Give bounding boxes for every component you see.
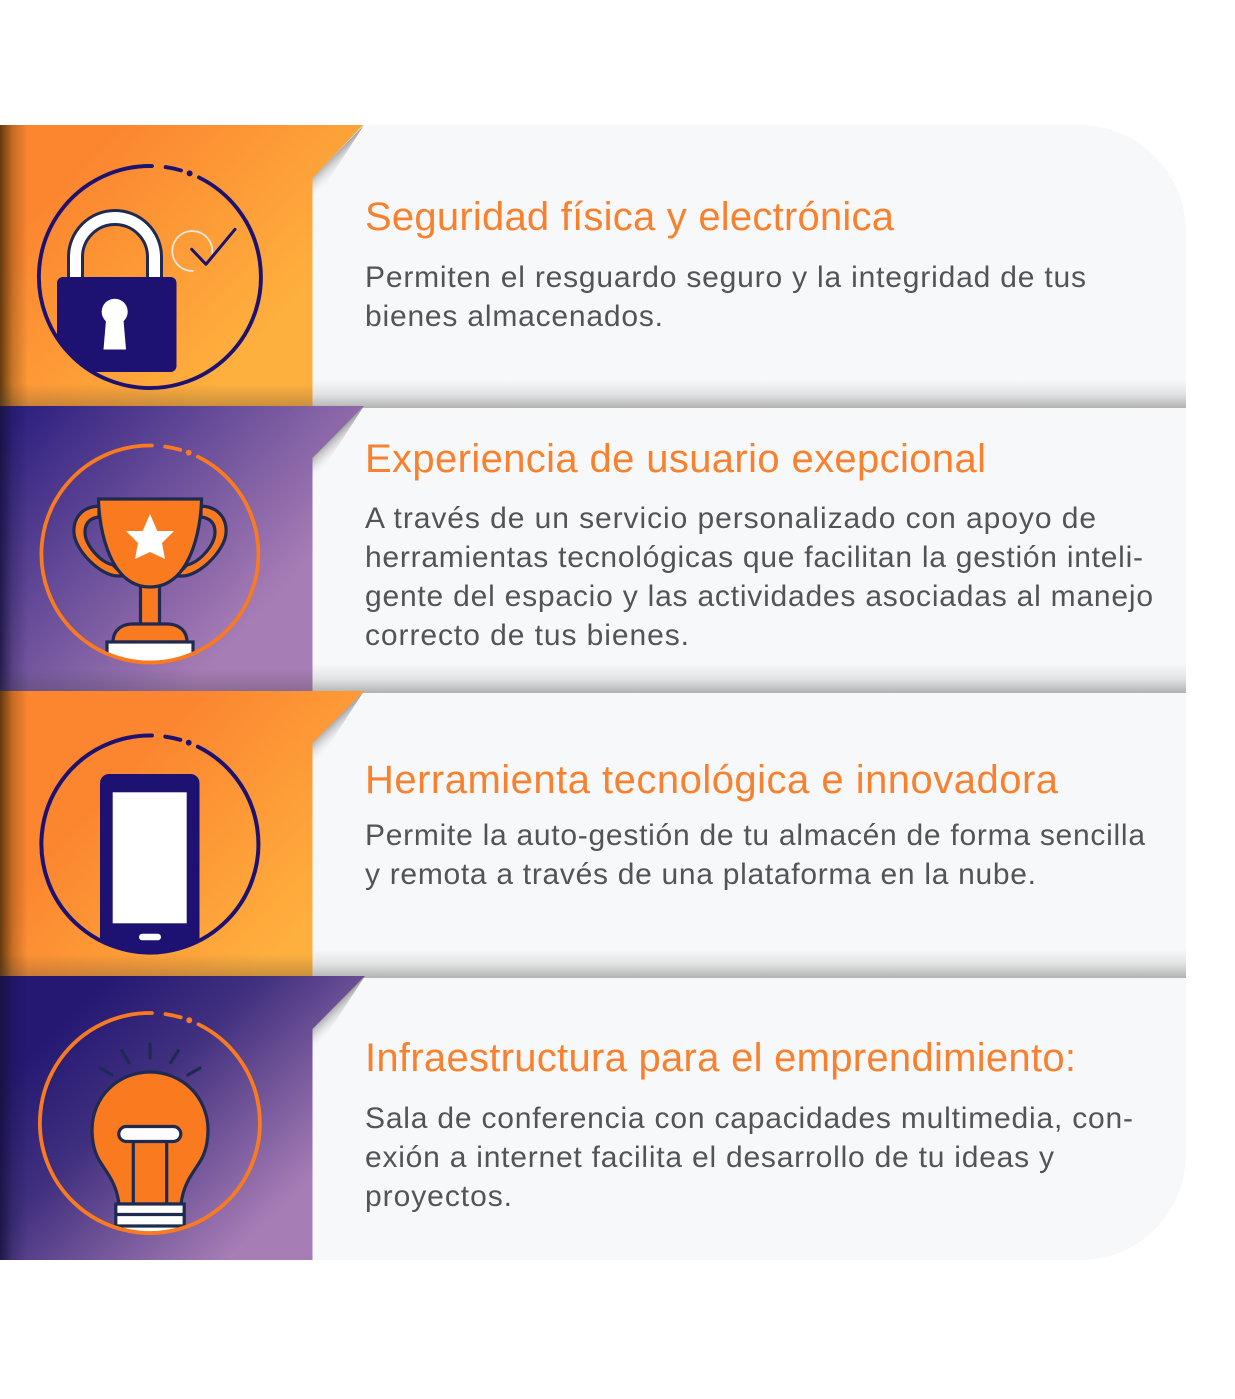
heading: experiencia: Experiencia de usuario exepcional (365, 437, 986, 481)
heading: herramienta: Herramienta tecnológica e innovadora (365, 758, 1059, 802)
text block: experiencia: A través de un servicio personalizado con apoyo de (365, 502, 1096, 535)
icon: trophy with star (41, 446, 258, 672)
heading: seguridad: Seguridad física y electrónica (365, 195, 895, 239)
panel: seguridad física y electrónica (0, 125, 1186, 408)
panel: experiencia de usuario (0, 406, 1186, 693)
text block: experiencia (365, 502, 1153, 652)
text block: experiencia: gente del espacio y las actividades asociadas al manejo (365, 580, 1153, 613)
text block: seguridad (365, 261, 1086, 333)
icon: light bulb (40, 1013, 260, 1244)
text block: experiencia: correcto de tus bienes. (365, 619, 689, 652)
text block: seguridad: Permiten el resguardo seguro y la integridad de tus (365, 261, 1086, 294)
text block: infraestructura: Sala de conferencia con capacidades multimedia, con- (365, 1102, 1133, 1135)
text block: experiencia: herramientas tecnológicas que facilitan la gestión inteli- (365, 541, 1143, 574)
panel: herramienta tecnológica (0, 691, 1186, 978)
text block: seguridad: bienes almacenados. (365, 300, 663, 333)
text block: herramienta: y remota a través de una plataforma en la nube. (365, 858, 1036, 891)
text block: infraestructura (365, 1102, 1133, 1213)
text block: herramienta (365, 819, 1145, 891)
text block: infraestructura: proyectos. (365, 1180, 512, 1213)
text block: herramienta: Permite la auto-gestión de tu almacén de forma sencilla (365, 819, 1145, 852)
panel: light text background (312, 125, 1186, 1260)
icon: smartphone (41, 736, 258, 964)
panel: infraestructura (0, 976, 1133, 1260)
heading: infraestructura: Infraestructura para el emprendimiento: (365, 1036, 1076, 1080)
icon: padlock with check (39, 166, 261, 388)
text block: infraestructura: exión a internet facilita el desarrollo de tu ideas y (365, 1141, 1054, 1174)
